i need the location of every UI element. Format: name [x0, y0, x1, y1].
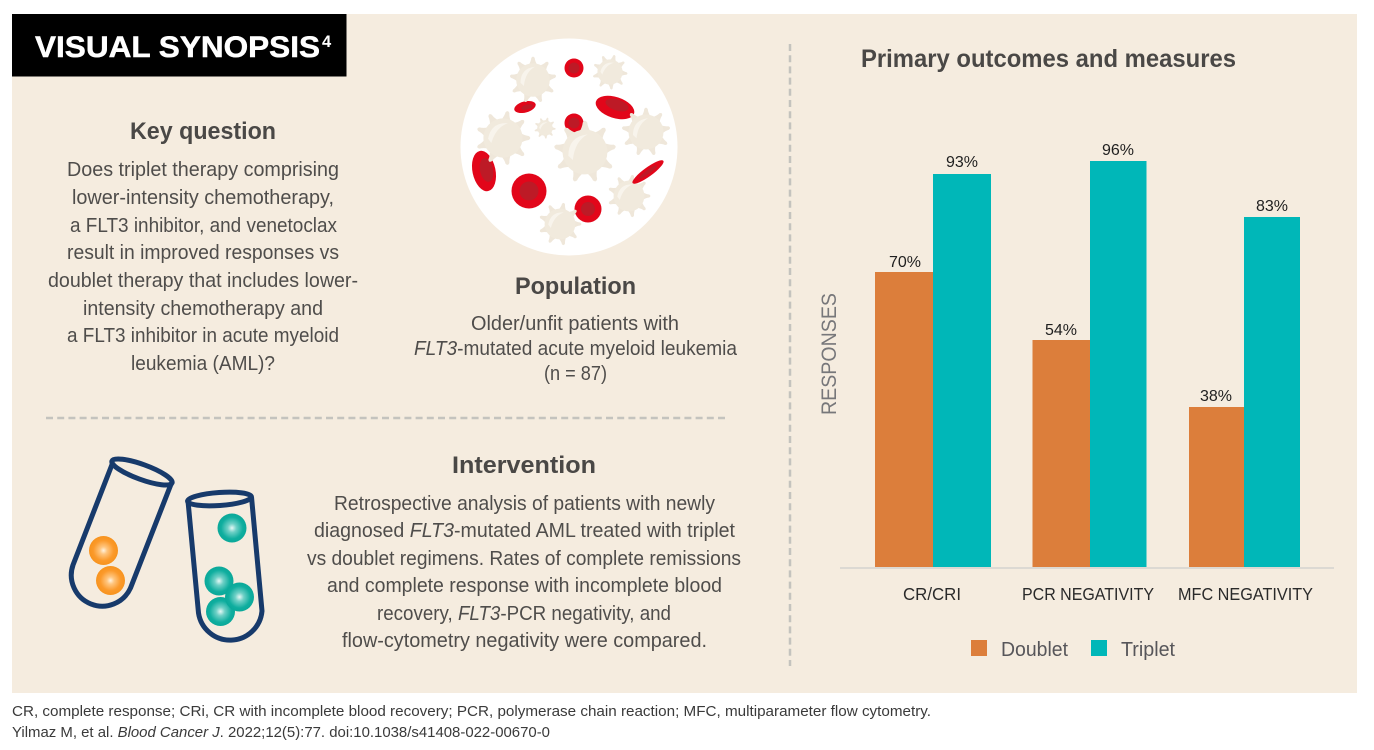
heading: population: Population [515, 273, 636, 300]
heading: intervention: Intervention [452, 452, 596, 479]
text block: intervention: recovery, FLT3-PCR negativity, and [377, 603, 671, 625]
footnote [12, 703, 931, 741]
bar group: MFC negativity: MFC NEGATIVITY [1178, 584, 1313, 604]
icon: test tube with teal spheres [187, 490, 262, 640]
text block: population: Older/unfit patients with [471, 313, 679, 335]
bar group: MFC negativity: 38% [1200, 388, 1232, 405]
bar group: CR/CRi: 70% [889, 254, 921, 271]
legend: Doublet [1001, 639, 1068, 661]
text block: population: FLT3-mutated acute myeloid leukemia [414, 338, 738, 360]
text block: intervention: vs doublet regimens. Rates of complete remissions [307, 548, 741, 570]
chart heading: Primary outcomes and measures [861, 45, 1236, 73]
text block: key question: leukemia (AML)? [131, 353, 275, 375]
text block: key question [48, 118, 358, 375]
text block: population: (n = 87) [544, 363, 607, 385]
footnote: Yilmaz M, et al. Blood Cancer J. 2022;12(5):77. doi:10.1038/s41408-022-00670-0 [12, 724, 550, 741]
title banner [12, 14, 346, 76]
text block: key question: a FLT3 inhibitor in acute myeloid [67, 325, 339, 347]
title banner: 4 [322, 33, 332, 51]
text block: key question: result in improved responses vs [67, 242, 339, 264]
text block: population [414, 273, 738, 385]
illustration: blood cells [460, 38, 678, 256]
bar group: CR/CRi: CR/CRI [903, 584, 961, 604]
text block: key question: a FLT3 inhibitor, and venetoclax [70, 215, 337, 237]
text block: intervention: Retrospective analysis of patients with newly [334, 493, 715, 515]
text block: key question: lower-intensity chemotherapy, [72, 187, 334, 209]
heading: key question: Key question [130, 118, 276, 145]
bar group: PCR negativity: PCR NEGATIVITY [1022, 584, 1154, 604]
bar group: CR/CRi [875, 154, 991, 604]
legend: Triplet [1121, 639, 1175, 661]
y axis label: RESPONSES [818, 293, 841, 415]
text block: intervention: diagnosed FLT3-mutated AML treated with triplet [314, 520, 735, 542]
text block: key question: doublet therapy that includes lower- [48, 270, 358, 292]
bar group: MFC negativity: 83% [1256, 198, 1288, 215]
bar group: CR/CRi: 93% [946, 154, 978, 171]
legend [971, 639, 1175, 661]
text block: intervention [307, 452, 741, 652]
bar group: PCR negativity: 54% [1045, 322, 1077, 339]
text block: intervention: and complete response with incomplete blood [327, 575, 722, 597]
text block: key question: Does triplet therapy comprising [67, 159, 339, 181]
text block: intervention: flow-cytometry negativity were compared. [342, 630, 707, 652]
bar group: MFC negativity [1178, 198, 1313, 604]
title banner: VISUAL SYNOPSIS [35, 31, 320, 64]
illustration: test tubes [71, 454, 262, 640]
text block: key question: intensity chemotherapy and [83, 298, 323, 320]
icon: test tube with orange spheres [71, 454, 175, 606]
bar group: PCR negativity: 96% [1102, 142, 1134, 159]
bar chart: responses [818, 142, 1334, 604]
bar group: PCR negativity [1022, 142, 1154, 604]
footnote: CR, complete response; CRi, CR with incomplete blood recovery; PCR, polymerase chain reaction; MFC, multiparameter flow cytometry. [12, 703, 931, 720]
